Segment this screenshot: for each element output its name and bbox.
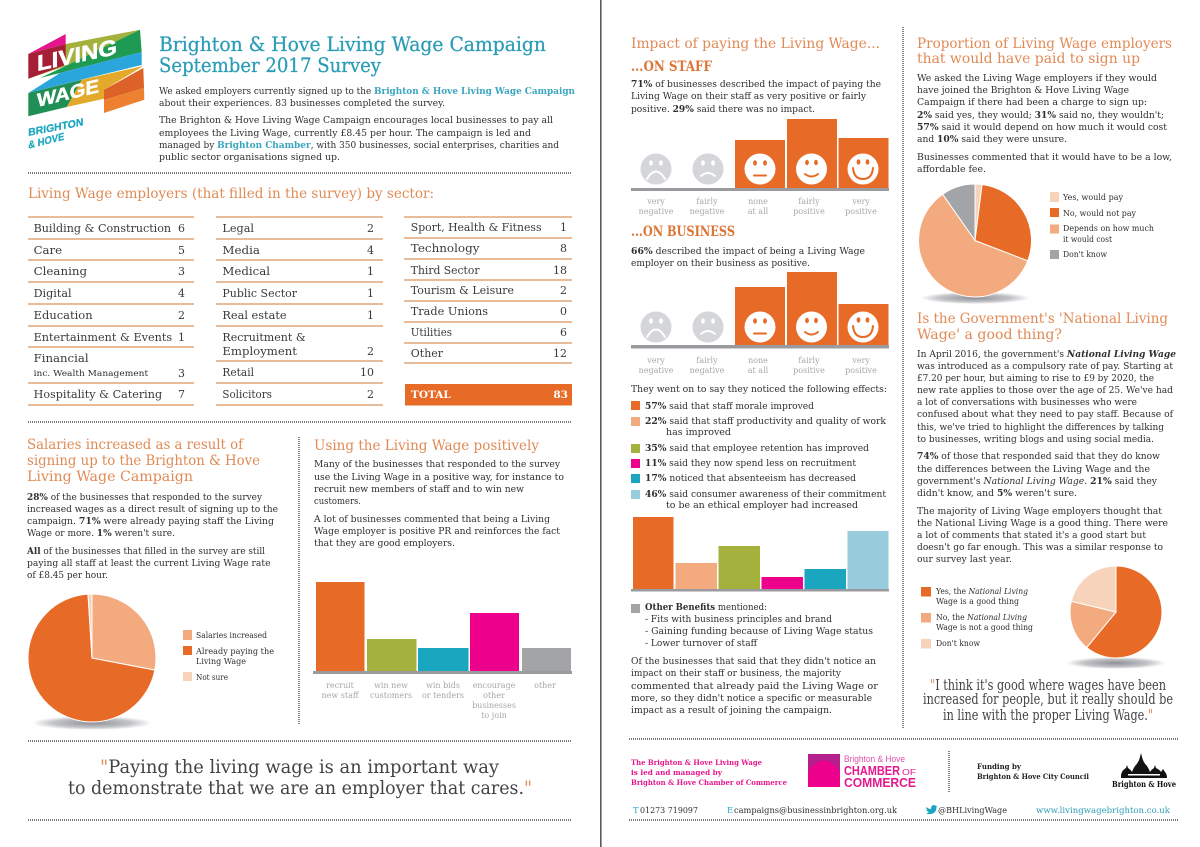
panel: salaries increased bbox=[26, 437, 278, 730]
icon: very positive face bbox=[848, 154, 878, 184]
text: using body: that they are good employers. bbox=[314, 539, 455, 549]
bar chart: uses: businesses bbox=[472, 701, 516, 710]
other benefits: - Fits with business principles and brand bbox=[645, 615, 832, 625]
footer: funding: Brighton & Hove City Council bbox=[977, 772, 1089, 781]
text: no impact note: Of the businesses that said that they didn't notice an bbox=[631, 657, 876, 667]
chart: impact on staff with smileys: negative bbox=[639, 207, 674, 216]
logo: chamber of commerce: Brighton & Hove bbox=[844, 754, 905, 765]
logo: chamber of commerce bbox=[808, 754, 916, 790]
chart: impact on business with smileys: at all bbox=[748, 366, 769, 375]
intro text: We asked employers currently signed up to the Brighton & Hove Living Wage Campaign bbox=[159, 87, 575, 97]
text: national living wage body: this, we've tried to highlight the differences by talking bbox=[917, 423, 1164, 433]
sector table column 2: 2 bbox=[367, 222, 374, 235]
text: national living wage body: £7.20 per hour, but aiming to rise to £9 by 2020, the bbox=[917, 374, 1154, 384]
text: no impact note: commented that already paid the Living Wage or bbox=[631, 682, 879, 692]
text: national living wage body: to businesses, writing blogs and using social media. bbox=[917, 435, 1154, 445]
sector table column 1: 6 bbox=[178, 222, 185, 235]
chart: impact on staff with smileys: very bbox=[646, 197, 665, 206]
legend: national living wage: Wage is not a good thing bbox=[936, 623, 1033, 632]
sector table column 2: Media bbox=[222, 244, 260, 257]
sector table column 1: 3 bbox=[178, 367, 185, 380]
legend: noticed effects: 17% noticed that absenteeism has decreased bbox=[645, 474, 856, 484]
sector table column 1: Financial bbox=[34, 352, 89, 365]
sector table column 3: 1 bbox=[560, 221, 567, 234]
text: using body: recruit new members of staff and to win new bbox=[314, 485, 524, 495]
legend: would pay: it would cost bbox=[1063, 235, 1113, 244]
icon: fairly positive face bbox=[796, 312, 827, 342]
text: proportion body: We asked the Living Wage employers if they would bbox=[917, 74, 1157, 84]
icon: fairly negative face bbox=[692, 312, 724, 342]
chart: impact on business with smileys: negative bbox=[639, 366, 674, 375]
sector table column 1: Digital bbox=[34, 287, 72, 300]
icon: fairly positive face bbox=[796, 154, 827, 184]
pie chart: would pay bbox=[919, 184, 1032, 304]
heading: salaries: Living Wage Campaign bbox=[27, 469, 193, 485]
chart: impact on business with smileys: negative bbox=[690, 366, 725, 375]
footer: contact row: T bbox=[633, 805, 639, 815]
text: national living wage body: the differences between the Living Wage and the bbox=[917, 465, 1150, 475]
text: salaries body: All of the businesses that filled in the survey are still bbox=[26, 547, 265, 557]
text: national living wage body: the National Living Wage is a good thing. There were bbox=[917, 519, 1168, 529]
text: national living wage body bbox=[917, 350, 1176, 565]
sector table column 2: Public Sector bbox=[222, 287, 298, 300]
legend: noticed effects: to be an ethical employer had increased bbox=[666, 501, 858, 511]
sector table column 3: 0 bbox=[560, 305, 567, 318]
legend: salaries bbox=[183, 630, 274, 682]
chart: impact on staff with smileys: positive bbox=[793, 207, 825, 216]
other benefits bbox=[631, 603, 873, 649]
bar chart: uses: customers bbox=[370, 691, 412, 700]
text: on staff bbox=[631, 80, 881, 115]
total box bbox=[405, 384, 572, 406]
text: proportion body: 57% said it would depend on how much it would cost bbox=[917, 123, 1167, 133]
sector table column 1: Entertainment & Events bbox=[34, 331, 172, 344]
pie chart: national living wage bbox=[1066, 566, 1166, 669]
sector table column 3: Technology bbox=[411, 242, 480, 255]
sector table column 1: 7 bbox=[178, 388, 185, 401]
sector table column 1: inc. Wealth Management bbox=[34, 369, 149, 378]
sector table column 3: 12 bbox=[553, 347, 567, 360]
sector table column 2: Recruitment & bbox=[222, 331, 306, 344]
text: using body: A lot of businesses commented that being a Living bbox=[313, 515, 550, 525]
sector table column 1: 4 bbox=[178, 287, 185, 300]
sector table column 2 bbox=[216, 217, 383, 405]
text: national living wage body: new rate applies to those over the age of 25. We've had bbox=[917, 386, 1173, 396]
quote: employer that cares: to demonstrate that we are an employer that cares." bbox=[68, 777, 532, 799]
text: using body: Wage employer is positive PR and reinforces the fact bbox=[314, 527, 560, 537]
footer: funding: Funding by bbox=[977, 762, 1022, 771]
sector table column 2: Real estate bbox=[222, 309, 287, 322]
panel: impact of paying the living wage bbox=[631, 36, 889, 716]
title: Brighton & Hove Living Wage Campaign bbox=[159, 33, 546, 56]
legend: salaries: Salaries increased bbox=[196, 631, 267, 640]
footer: funding bbox=[977, 762, 1089, 781]
heading: salaries bbox=[27, 437, 260, 485]
text: on staff: 71% of businesses described the impact of paying the bbox=[631, 80, 881, 90]
text: national living wage body: The majority of Living Wage employers thought that bbox=[917, 507, 1162, 517]
footer: led and managed by: The Brighton & Hove Living Wage bbox=[631, 758, 762, 767]
icon: very negative face bbox=[640, 154, 672, 184]
heading: proportion: that would have paid to sign up bbox=[917, 51, 1140, 67]
heading: national living wage: Wage' a good thing? bbox=[917, 327, 1062, 343]
bar chart: uses: new staff bbox=[321, 691, 360, 700]
text: proportion body: and 10% said they were unsure. bbox=[917, 135, 1067, 145]
subheading: on staff: ...ON STAFF bbox=[631, 59, 712, 75]
title bbox=[159, 33, 546, 77]
text: on staff: Living Wage on their staff as very positive or fairly bbox=[631, 92, 867, 102]
text: national living wage body: confused about what they need to pay staff. Because of bbox=[917, 410, 1174, 420]
chart: impact on staff with smileys: very bbox=[851, 197, 870, 206]
text: national living wage body: our survey last year. bbox=[917, 555, 1012, 565]
legend: noticed effects: 57% said that staff morale improved bbox=[645, 402, 814, 412]
legend: salaries: Already paying the bbox=[195, 647, 274, 656]
text: national living wage body: In April 2016, the government's National Living Wage bbox=[917, 350, 1176, 360]
bar chart: uses: win bids bbox=[426, 681, 460, 690]
heading: using: Using the Living Wage positively bbox=[314, 438, 539, 454]
bar chart: uses: other bbox=[483, 691, 505, 700]
heading: national living wage bbox=[917, 311, 1168, 343]
footer: contact row: @BHLivingWage bbox=[938, 805, 1007, 815]
logo: chamber of commerce: COMMERCE bbox=[844, 775, 916, 790]
sector table column 1: Hospitality & Catering bbox=[34, 388, 162, 401]
panel: using the living wage positively bbox=[313, 438, 572, 720]
heading: proportion: Proportion of Living Wage employers bbox=[917, 36, 1172, 52]
legend: national living wage bbox=[921, 587, 1033, 648]
sector table column 2: Retail bbox=[222, 366, 254, 379]
legend: noticed effects: 35% said that employee retention has improved bbox=[645, 444, 869, 454]
legend: noticed effects: 46% said consumer awareness of their commitment bbox=[645, 490, 886, 500]
footer: contact row: 01273 719097 bbox=[640, 805, 698, 815]
sector table column 1: 3 bbox=[178, 265, 185, 278]
sector table column 3: Trade Unions bbox=[411, 305, 488, 318]
text: salaries body: Wage or more. 1% weren't sure. bbox=[27, 529, 175, 539]
intro text: about their experiences. 83 businesses completed the survey. bbox=[159, 99, 445, 109]
sector table column 2: 2 bbox=[367, 345, 374, 358]
chart: impact on staff with smileys: at all bbox=[748, 207, 769, 216]
intro text: The Brighton & Hove Living Wage Campaign encourages local businesses to pay all bbox=[159, 116, 553, 126]
sector table column 2: Solicitors bbox=[222, 388, 272, 401]
intro text bbox=[159, 87, 575, 163]
chart: impact on business with smileys: none bbox=[748, 356, 768, 365]
total box: TOTAL bbox=[411, 389, 451, 401]
text: proportion body: have joined the Brighton & Hove Living Wage bbox=[917, 86, 1129, 96]
text: using body: customers. bbox=[314, 497, 361, 507]
text: national living wage body: doesn't go far enough. This was a similar response to bbox=[917, 543, 1163, 553]
text: national living wage body: didn't know, and 5% weren't sure. bbox=[917, 489, 1077, 499]
sector table column 2: Employment bbox=[222, 345, 298, 358]
text: on business: employer on their business as positive. bbox=[631, 259, 810, 269]
legend: would pay bbox=[1050, 192, 1154, 259]
sector table column 3: Tourism & Leisure bbox=[411, 284, 514, 297]
chart: impact on business with smileys: very bbox=[646, 356, 665, 365]
chart: impact on staff with smileys: fairly bbox=[696, 197, 718, 206]
heading: salaries: signing up to the Brighton & Hove bbox=[27, 453, 260, 469]
footer: contact row bbox=[633, 805, 1171, 815]
quote: proper living wage bbox=[923, 676, 1173, 724]
other benefits: - Gaining funding because of Living Wage status bbox=[645, 627, 873, 637]
footer: contact row: www.livingwagebrighton.co.uk bbox=[1036, 805, 1171, 815]
sector table column 3: 8 bbox=[560, 242, 567, 255]
chart: impact on staff with smileys: fairly bbox=[798, 197, 820, 206]
footer: led and managed by: is led and managed by bbox=[631, 768, 723, 777]
sector table column 1: 2 bbox=[178, 309, 185, 322]
logo: Brighton & Hove City Council: Brighton & Hove bbox=[1112, 779, 1176, 789]
chart: impact on business with smileys bbox=[631, 272, 889, 375]
sector table column 2: 10 bbox=[360, 366, 374, 379]
bar chart: uses: or tenders bbox=[422, 691, 464, 700]
quote: employer that cares: "Paying the living wage is an important way bbox=[100, 756, 499, 778]
legend: salaries: Living Wage bbox=[196, 657, 246, 666]
heading: proportion bbox=[917, 36, 1172, 67]
panel: proportion that would have paid bbox=[917, 36, 1172, 304]
text: salaries body: paying all staff at least the current Living Wage rate bbox=[27, 559, 270, 569]
chart: impact on staff with smileys bbox=[631, 119, 889, 216]
text: using body: Many of the businesses that responded to the survey bbox=[314, 460, 561, 470]
icon: fairly negative face bbox=[692, 154, 724, 184]
logo text: Brighton: BRIGHTON bbox=[28, 116, 83, 139]
text: proportion body: Campaign if there had been a charge to sign up: bbox=[917, 98, 1147, 108]
sector table column 1: 1 bbox=[178, 331, 185, 344]
text: salaries body: of £8.45 per hour. bbox=[27, 571, 108, 581]
text: proportion body: affordable fee. bbox=[917, 165, 986, 175]
other benefits: - Lower turnover of staff bbox=[645, 639, 758, 649]
sector table column 2: 1 bbox=[367, 309, 374, 322]
chart: impact on business with smileys: fairly bbox=[798, 356, 820, 365]
legend: noticed effects: 11% said they now spend less on recruitment bbox=[645, 459, 856, 469]
icon: neutral face bbox=[744, 312, 776, 342]
text: national living wage body: 74% of those that responded said that they do know bbox=[917, 452, 1160, 462]
text: on staff: positive. 29% said there was no impact. bbox=[631, 105, 815, 115]
sector table column 3: Other bbox=[411, 347, 444, 360]
sector table column 1 bbox=[28, 217, 194, 405]
intro text: employees the Living Wage, currently £8.45 per hour. The campaign is led and bbox=[159, 129, 531, 139]
text: proportion body: 2% said yes, they would; 31% said no, they wouldn't; bbox=[917, 111, 1164, 121]
chart: impact on business with smileys: positive bbox=[793, 366, 825, 375]
heading: national living wage: Is the Government's 'National Living bbox=[917, 311, 1168, 327]
text: no impact note: more, so they didn't notice a specific or measurable bbox=[631, 694, 872, 704]
sector table column 3: 18 bbox=[553, 264, 567, 277]
legend: noticed effects: 22% said that staff productivity and quality of work bbox=[645, 417, 887, 427]
sector table column 1: Cleaning bbox=[34, 265, 87, 278]
chart: impact on business with smileys: positive bbox=[845, 366, 877, 375]
text: salaries body: 28% of the businesses that responded to the survey bbox=[27, 493, 263, 503]
text: no impact note: impact on their staff or business, the majority bbox=[631, 669, 842, 679]
subheading: on business: ...ON BUSINESS bbox=[631, 224, 735, 240]
sector table column 2: 1 bbox=[367, 287, 374, 300]
logo text: & Hove: & HOVE bbox=[28, 131, 64, 152]
total box: 83 bbox=[553, 389, 568, 401]
logo text: LIVING: LIVING bbox=[37, 34, 117, 76]
text: proportion body bbox=[917, 74, 1172, 175]
intro text: managed by Brighton Chamber, with 350 businesses, social enterprises, charities and bbox=[159, 141, 559, 151]
text: national living wage body: was introduced as a compulsory rate of pay. Starting at bbox=[917, 362, 1173, 372]
heading: impact: Impact of paying the Living Wage... bbox=[631, 36, 880, 52]
legend: noticed effects: has improved bbox=[666, 428, 731, 438]
logo: chamber of commerce: OF bbox=[902, 768, 916, 777]
sector table column 1: Care bbox=[34, 244, 62, 257]
text: no impact note: impact as a result of joining the campaign. bbox=[631, 706, 832, 716]
footer: led and managed by: Brighton & Hove Chamber of Commerce bbox=[631, 778, 787, 787]
bar chart: uses: to join bbox=[481, 711, 507, 720]
text: on business bbox=[631, 247, 865, 269]
text: national living wage body: a lot of comments that stated it's a good start but bbox=[917, 531, 1146, 541]
sector table column 3 bbox=[404, 217, 572, 363]
text: using body bbox=[313, 460, 564, 549]
icon: very positive face bbox=[848, 312, 878, 342]
text: salaries body: increased wages as a direct result of signing up to the bbox=[27, 505, 278, 515]
legend: national living wage: Wage is a good thing bbox=[936, 597, 1019, 606]
text: national living wage body: government's National Living Wage . 21% said they bbox=[917, 477, 1158, 487]
bar chart: uses: win new bbox=[374, 681, 408, 690]
sector table column 3: 2 bbox=[560, 284, 567, 297]
sector table column 1: Building & Construction bbox=[34, 222, 171, 235]
sector table column 2: 1 bbox=[367, 265, 374, 278]
chart: impact on business with smileys: very bbox=[851, 356, 870, 365]
intro text: public sector organisations signed up. bbox=[159, 153, 340, 163]
sector table column 2: 4 bbox=[367, 244, 374, 257]
chart: impact on staff with smileys: positive bbox=[845, 207, 877, 216]
legend: noticed effects: They went on to say they noticed the following effects: bbox=[631, 385, 887, 395]
legend: national living wage: Yes, the National Living bbox=[935, 587, 1028, 596]
quote: employer that cares bbox=[68, 756, 532, 799]
other benefits: Other Benefits mentioned: bbox=[645, 603, 767, 613]
bar chart: uses: recruit bbox=[326, 681, 355, 690]
bar chart: uses: encourage bbox=[473, 681, 516, 690]
sector table column 3: Utilities bbox=[411, 326, 452, 339]
text: no impact note bbox=[631, 657, 879, 716]
sector table column 2: 2 bbox=[367, 388, 374, 401]
sector table column 3: Third Sector bbox=[411, 264, 480, 277]
text: salaries body bbox=[26, 493, 278, 581]
heading: employers by sector: Living Wage employers (that filled in the survey) by sector: bbox=[28, 186, 434, 202]
chart: impact on staff with smileys: negative bbox=[690, 207, 725, 216]
title: September 2017 Survey bbox=[159, 54, 381, 77]
text: national living wage body: a lot of conversations with businesses who were bbox=[917, 398, 1137, 408]
sector table column 1: Education bbox=[34, 309, 93, 322]
logo: Brighton & Hove City Council bbox=[1112, 753, 1176, 789]
footer: contact row: E bbox=[727, 805, 733, 815]
logo: chamber of commerce: CHAMBER bbox=[844, 763, 901, 778]
sector table column 2: Legal bbox=[222, 222, 254, 235]
text: salaries body: campaign. 71% were already paying staff the Living bbox=[27, 517, 274, 527]
sector table column 1: 5 bbox=[178, 244, 185, 257]
legend: national living wage: Don't know bbox=[936, 639, 980, 648]
pie chart: salaries bbox=[28, 594, 156, 730]
icon: very negative face bbox=[640, 312, 672, 342]
icon: neutral face bbox=[744, 154, 776, 184]
sector table column 2: Medical bbox=[222, 265, 271, 278]
legend: would pay: No, would not pay bbox=[1063, 209, 1136, 218]
legend: salaries: Not sure bbox=[196, 673, 228, 682]
chart: impact on business with smileys: fairly bbox=[696, 356, 718, 365]
sector table column 3: 6 bbox=[560, 326, 567, 339]
legend: would pay: Yes, would pay bbox=[1062, 193, 1123, 202]
legend: would pay: Depends on how much bbox=[1063, 224, 1154, 233]
bar chart: uses bbox=[313, 582, 572, 720]
legend: would pay: Don't know bbox=[1063, 250, 1107, 259]
sector table column 3: Sport, Health & Fitness bbox=[411, 221, 542, 234]
bar chart: uses: other bbox=[534, 681, 556, 690]
footer: led and managed by bbox=[631, 758, 787, 787]
legend: noticed effects bbox=[631, 385, 887, 511]
chart: impact on staff with smileys: none bbox=[748, 197, 768, 206]
panel: national living wage bbox=[917, 311, 1176, 724]
bar chart: effects bbox=[631, 517, 889, 592]
text: using body: use the Living Wage in a positive way, for instance to bbox=[314, 473, 564, 483]
heading: salaries: Salaries increased as a result of bbox=[27, 437, 245, 453]
footer: contact row: campaigns@businessinbrighton.org.uk bbox=[734, 805, 898, 815]
icon: twitter bird bbox=[926, 805, 937, 814]
text: proportion body: Businesses commented that it would have to be a low, bbox=[917, 153, 1172, 163]
legend: national living wage: No, the National Living bbox=[936, 613, 1027, 622]
logo: Living Wage Brighton & Hove bbox=[28, 30, 144, 152]
logo text: WAGE: WAGE bbox=[37, 76, 99, 112]
text: on business: 66% described the impact of being a Living Wage bbox=[631, 247, 865, 257]
